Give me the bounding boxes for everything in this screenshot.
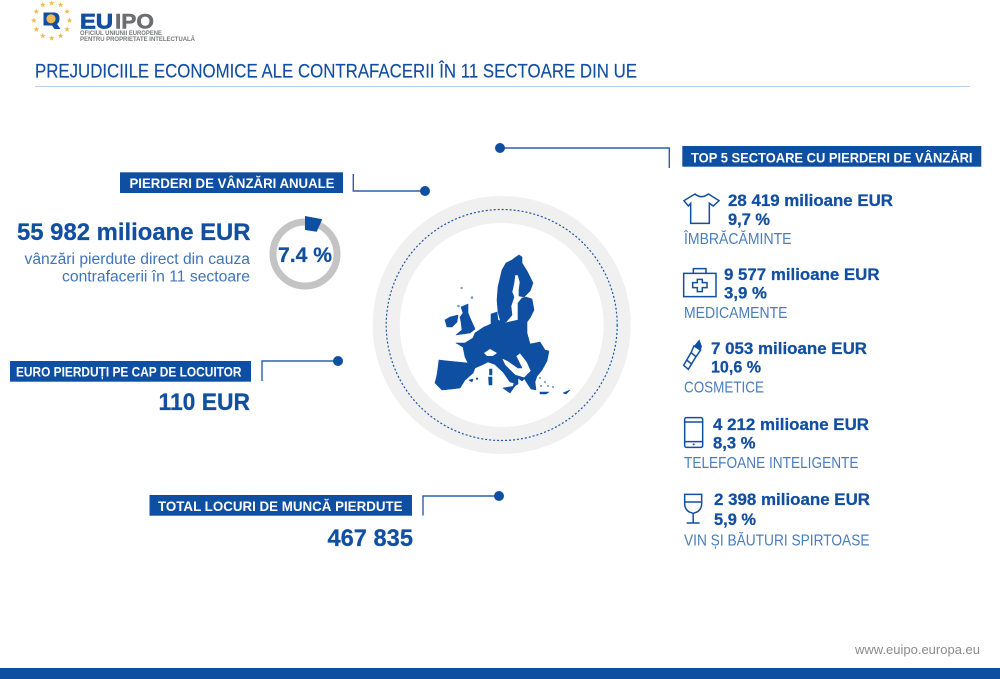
share: 3,9 %	[724, 284, 767, 302]
value: 7 053 milioane EUR	[711, 339, 867, 358]
sector: medicines	[684, 265, 880, 322]
icon: lipstick	[684, 339, 702, 369]
label text: PIERDERI DE VÂNZĂRI ANUALE	[130, 174, 334, 191]
sector: clothing	[683, 191, 893, 248]
panel: euro lost per capita	[10, 356, 343, 416]
sector: wine and spirits	[684, 490, 870, 550]
panel: annual sales losses	[17, 172, 430, 286]
donut chart 7.4 %	[273, 216, 337, 286]
connector	[500, 148, 669, 168]
connector dot	[494, 491, 504, 501]
name: COSMETICE	[684, 380, 764, 396]
label box	[120, 172, 343, 193]
sector: cosmetics	[684, 339, 867, 396]
logo wordmark: EU	[80, 10, 113, 33]
value: 28 419 milioane EUR	[728, 191, 893, 210]
icon: smartphone	[685, 418, 703, 447]
dotted circle	[386, 210, 617, 440]
description line 1: vânzări pierdute direct din cauza	[24, 251, 250, 268]
share: 10,6 %	[711, 358, 761, 377]
connector dot	[420, 186, 430, 196]
label box	[682, 146, 981, 167]
icon: first-aid kit	[684, 269, 716, 297]
value: 9 577 milioane EUR	[724, 265, 880, 284]
name: VIN ȘI BĂUTURI SPIRTOASE	[684, 531, 870, 550]
name: ÎMBRĂCĂMINTE	[683, 229, 792, 248]
value: 2 398 milioane EUR	[714, 490, 870, 509]
share: 5,9 %	[714, 510, 756, 529]
panel: top 5 sectors	[495, 143, 981, 550]
title: PREJUDICIILE ECONOMICE ALE CONTRAFACERII ÎN 11 SECTOARE DIN UE	[35, 60, 637, 82]
logo subtitle line 2: PENTRU PROPRIETATE INTELECTUALĂ	[80, 36, 196, 43]
donut chart 7.4 %: 7.4 %	[278, 243, 332, 267]
icon: wine glass	[685, 494, 702, 523]
share: 9,7 %	[728, 210, 770, 229]
sector: smartphones	[684, 415, 869, 472]
label text: TOP 5 SECTOARE CU PIERDERI DE VÂNZĂRI	[691, 148, 972, 165]
panel: central map ring	[386, 210, 617, 440]
label text: EURO PIERDUȚI PE CAP DE LOCUITOR	[16, 364, 242, 380]
label box	[10, 361, 251, 382]
label box	[150, 495, 412, 516]
connector	[262, 361, 338, 381]
connector dot	[495, 143, 505, 153]
icon: t-shirt	[684, 194, 719, 223]
value: 467 835	[328, 525, 413, 552]
logo: EUIPO	[31, 0, 196, 43]
icon: ring of stars	[31, 0, 72, 41]
website url: www.euipo.europa.eu	[854, 643, 980, 657]
footer bar	[0, 668, 1000, 679]
value: 4 212 milioane EUR	[713, 415, 869, 434]
panel: total jobs lost	[150, 491, 504, 552]
share: 8,3 %	[713, 434, 756, 452]
label text: TOTAL LOCURI DE MUNCĂ PIERDUTE	[158, 498, 402, 514]
connector	[423, 496, 499, 516]
logo subtitle line 1: OFICIUL UNIUNII EUROPENE	[80, 30, 162, 37]
connector dot	[333, 356, 343, 366]
grey ring	[386, 210, 617, 440]
connector	[353, 174, 425, 191]
icon: R mark	[44, 12, 60, 29]
map of the EU	[435, 255, 570, 394]
name: MEDICAMENTE	[684, 305, 788, 322]
value: 55 982 milioane EUR	[17, 219, 250, 246]
logo wordmark grey: IPO	[115, 10, 154, 33]
description line 2: contrafacerii în 11 sectoare	[62, 269, 250, 286]
name: TELEFOANE INTELIGENTE	[684, 455, 858, 472]
value: 110 EUR	[158, 389, 250, 416]
